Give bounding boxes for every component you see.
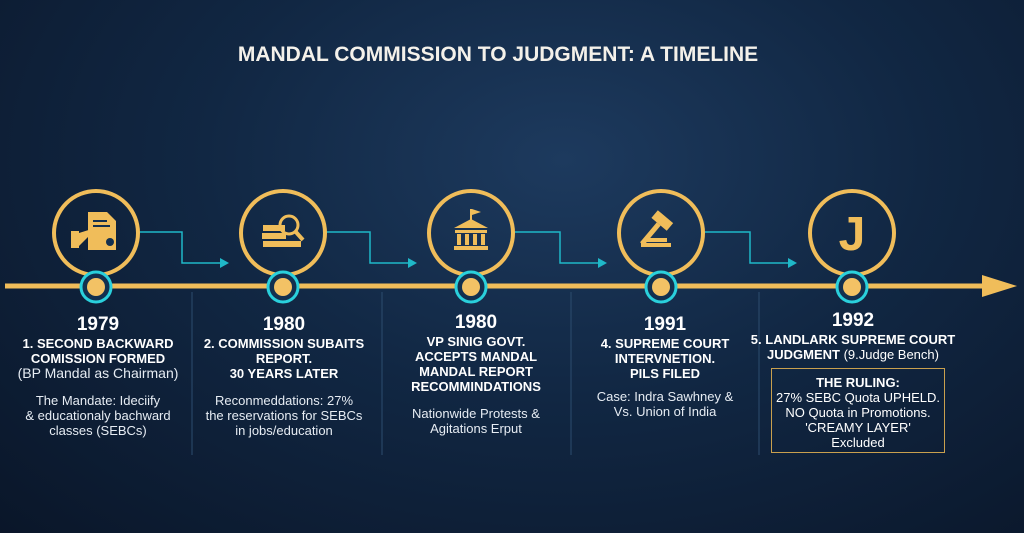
milestone 4 text: 1991: [644, 314, 686, 335]
milestone 1 text: The Mandate: Ideciify: [36, 393, 160, 408]
icon: document with hand: [71, 212, 116, 250]
icon: letter J: J: [839, 208, 865, 261]
milestone 2 text: 1980: [263, 314, 305, 335]
callout: the ruling: NO Quota in Promotions.: [785, 405, 931, 420]
milestone 2 text: the reservations for SEBCs: [206, 408, 362, 423]
callout: the ruling: [771, 368, 945, 453]
milestone 3 text: [411, 312, 541, 436]
milestone 5 text: 1992: [832, 310, 874, 331]
milestone 2 text: 30 YEARS LATER: [230, 366, 338, 381]
milestone circles: [54, 191, 894, 302]
milestone 4 text: 4. SUPREME COURT: [601, 336, 729, 351]
callout: the ruling: Excluded: [831, 435, 885, 450]
icon: gavel: [635, 210, 673, 251]
milestone 3 text: Nationwide Protests &: [412, 406, 540, 421]
milestone 2 text: [204, 314, 364, 438]
milestone 2 text: REPORT.: [256, 351, 312, 366]
milestone 2 text: in jobs/education: [235, 423, 333, 438]
icon: government building: [454, 209, 488, 250]
timeline axis arrow: [5, 275, 1017, 297]
milestone 3 text: MANDAL REPORT: [419, 364, 533, 379]
milestone 1 text: & educationaly bachward: [25, 408, 171, 423]
milestone 4 text: Case: Indra Sawhney &: [597, 389, 733, 404]
milestone 1 text: 1. SECOND BACKWARD: [23, 336, 173, 351]
milestone 5 text: [751, 310, 956, 362]
milestone 4 text: INTERVNETION.: [615, 351, 715, 366]
milestone 1 text: COMISSION FORMED: [31, 351, 165, 366]
milestone 3 text: VP SINIG GOVT.: [427, 334, 525, 349]
milestone 1 text: [18, 314, 178, 438]
milestone 1 text: (BP Mandal as Chairman): [18, 365, 178, 381]
callout: the ruling: THE RULING:: [816, 375, 900, 390]
milestone 3 text: Agitations Erput: [430, 421, 522, 436]
milestone 3 text: RECOMMINDATIONS: [411, 379, 541, 394]
milestone 2 text: 2. COMMISSION SUBAITS: [204, 336, 364, 351]
title: MANDAL COMMISSION TO JUDGMENT: A TIMELINE: [238, 43, 758, 66]
milestone 4 text: Vs. Union of India: [614, 404, 716, 419]
milestone 1 text: 1979: [77, 314, 119, 335]
callout: the ruling: 27% SEBC Quota UPHELD.: [776, 390, 940, 405]
milestone 5 text: 5. LANDLARK SUPREME COURT: [751, 332, 955, 347]
callout: the ruling: 'CREAMY LAYER': [805, 420, 911, 435]
milestone 2 text: Reconmeddations: 27%: [215, 393, 353, 408]
milestone 4 text: PILS FILED: [630, 366, 700, 381]
milestone 5 text: JUDGMENT (9.Judge Bench): [767, 347, 939, 362]
icon: books with magnifier: [262, 216, 303, 247]
milestone 4 text: [597, 314, 734, 419]
connector arrows: [138, 232, 788, 263]
milestone 3 text: 1980: [455, 312, 497, 333]
milestone 3 text: ACCEPTS MANDAL: [415, 349, 537, 364]
milestone 1 text: classes (SEBCs): [49, 423, 147, 438]
